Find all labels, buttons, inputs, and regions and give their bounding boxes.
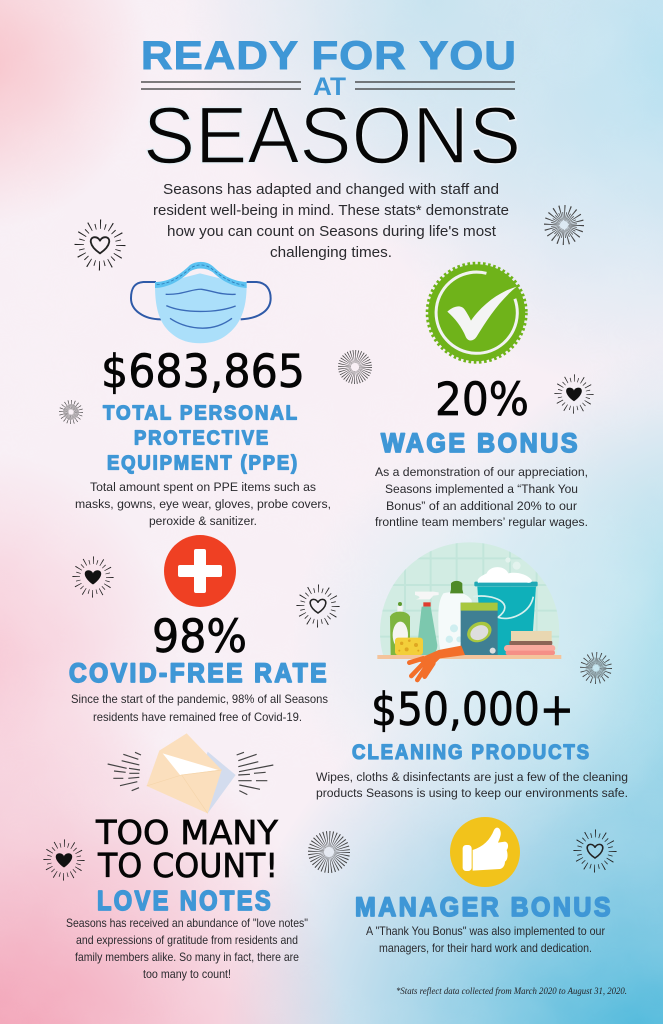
description: manager bonus: A "Thank You Bonus" was also implemented to our — [366, 924, 605, 938]
intro text: challenging times. — [270, 245, 392, 261]
description: wage bonus — [375, 465, 588, 529]
intro text: Seasons has adapted and changed with staff and — [163, 182, 499, 198]
description: covid — [71, 692, 328, 724]
description: cleaning: products Seasons is using to keep our environments safe. — [316, 786, 628, 800]
stat: 20%: 20% — [435, 373, 529, 426]
description: ppe — [75, 480, 331, 528]
description: manager bonus: managers, for their hard work and dedication. — [379, 941, 592, 955]
panel: cleaning products — [316, 540, 628, 800]
icon: open envelope with rays — [108, 733, 273, 813]
icon: cleaning supplies — [373, 540, 567, 680]
icon: outline heart burst, top left — [79, 224, 121, 266]
description: wage bonus: frontline team members’ regular wages. — [375, 515, 588, 529]
icon: sunburst, bottom center — [316, 839, 342, 865]
icon: outline heart burst, right of 98% — [300, 588, 336, 624]
intro text — [153, 182, 509, 261]
intro text: resident well-being in mind. These stats* demonstrate — [153, 203, 509, 219]
description: manager bonus — [366, 924, 605, 955]
description: love notes: family members alike. So many in fact, there are — [75, 951, 299, 964]
intro text: how you can count on Seasons during life's most — [167, 224, 496, 240]
panel: wage bonus — [375, 261, 588, 529]
title — [141, 34, 521, 181]
description: love notes: Seasons has received an abundance of "love notes" — [66, 917, 308, 930]
icon: solid heart burst, bottom left — [47, 843, 81, 877]
description: wage bonus: As a demonstration of our appreciation, — [375, 465, 588, 479]
heading: total ppe: EQUIPMENT (PPE) — [107, 452, 299, 474]
panel: covid-free rate — [69, 535, 329, 724]
heading: love notes: LOVE NOTES — [97, 885, 273, 916]
description: ppe: peroxide & sanitizer. — [149, 514, 257, 528]
heading: covid-free rate: COVID-FREE RATE — [69, 658, 329, 688]
description: love notes — [66, 917, 308, 981]
panel: ppe — [75, 262, 331, 528]
heading: total ppe — [103, 402, 299, 474]
description: ppe: masks, gowns, eye wear, gloves, probe covers, — [75, 497, 331, 511]
heading: total ppe: PROTECTIVE — [134, 428, 270, 450]
icon: red plus — [164, 535, 236, 607]
icon: face mask — [131, 262, 271, 343]
description: covid: Since the start of the pandemic, 98% of all Seasons — [71, 692, 328, 706]
stat: 50,000+: $50,000+ — [371, 683, 574, 736]
panel: manager bonus — [355, 817, 627, 996]
icon: sunburst, right — [586, 658, 606, 678]
description: love notes: and expressions of gratitude from residents and — [76, 934, 298, 947]
description: covid: residents have remained free of Covid-19. — [93, 710, 302, 724]
stat: 683,865: $683,865 — [101, 345, 305, 398]
description: wage bonus: Bonus” of an additional 20% to our — [386, 499, 577, 513]
footnote: *Stats reflect data collected from March 2020 to August 31, 2020. — [396, 986, 627, 996]
stat: too many to count: TO COUNT! — [97, 846, 278, 885]
icon: green check badge — [425, 261, 529, 365]
stat: too many to count: TOO MANY — [95, 813, 279, 852]
description: wage bonus: Seasons implemented a “Thank You — [385, 482, 578, 496]
stat: too many to count — [95, 813, 279, 885]
icon: sunburst, top right — [552, 213, 576, 237]
stat: 98%: 98% — [152, 610, 247, 663]
title line: at: AT — [313, 73, 346, 101]
description: cleaning — [316, 770, 628, 800]
heading: manager bonus: MANAGER BONUS — [355, 892, 613, 922]
icon: solid heart burst, right of 20% — [558, 378, 590, 410]
icon: thumbs up — [450, 817, 520, 887]
heading: cleaning products: CLEANING PRODUCTS — [352, 741, 591, 764]
description: cleaning: Wipes, cloths & disinfectants are just a few of the cleaning — [316, 770, 628, 784]
panel: love notes — [66, 733, 308, 981]
double rules — [141, 82, 515, 89]
title line: seasons: SEASONS — [143, 91, 521, 181]
icon: sunburst, center — [344, 356, 366, 378]
description: ppe: Total amount spent on PPE items such as — [90, 480, 316, 494]
icon: outline heart burst, bottom right — [577, 833, 613, 869]
heading: wage bonus: WAGE BONUS — [381, 428, 580, 458]
icon: sunburst, left — [64, 405, 78, 419]
title line: ready for you: READY FOR YOU — [141, 34, 517, 78]
icon: solid heart burst, left of 98% — [76, 560, 110, 594]
description: love notes: too many to count! — [143, 968, 231, 981]
heading: total ppe: TOTAL PERSONAL — [103, 402, 299, 424]
